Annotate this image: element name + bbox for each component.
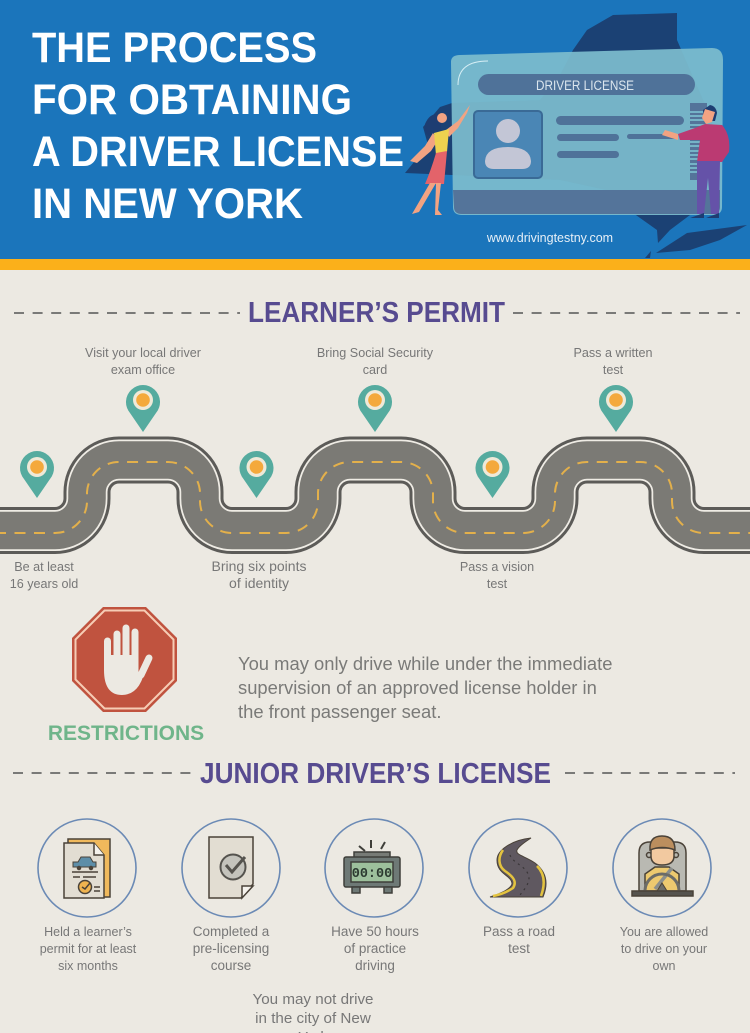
step: vision test: test <box>487 577 508 591</box>
map: New York state silhouette <box>405 13 747 258</box>
icon: course certificate <box>209 837 253 898</box>
caption: learner's permit held: six months <box>58 959 118 973</box>
caption: road test: Pass a road <box>483 924 555 939</box>
icon: alarm clock: 00:00 <box>352 867 392 882</box>
caption: drive on your own: own <box>653 959 676 973</box>
step: age requirement: 16 years old <box>10 577 78 591</box>
step: age requirement: Be at least <box>14 560 74 574</box>
driver license card <box>451 48 723 215</box>
pin 4 <box>358 385 392 432</box>
step: six points of identity: of identity <box>229 575 289 591</box>
caption: drive on your own: You are allowed <box>620 925 708 939</box>
title: THE PROCESS <box>32 24 317 72</box>
caption: drive on your own: to drive on your <box>621 942 707 956</box>
caption: road test: test <box>508 941 530 956</box>
caption: learner's permit held: permit for at least <box>40 942 137 956</box>
restrictions text: You may only drive while under the immediate <box>238 653 612 674</box>
caption: 50 hours practice: driving <box>355 958 395 973</box>
icon circles row <box>38 819 711 917</box>
caption: pre-licensing course: Completed a <box>193 924 270 939</box>
title: A DRIVER LICENSE <box>32 128 404 176</box>
caption: pre-licensing course: pre-licensing <box>193 941 269 956</box>
icon: driver at wheel <box>632 836 693 896</box>
card title bar <box>478 74 695 95</box>
step: visit exam office: exam office <box>111 363 175 377</box>
restriction note: New York City: in the city of New <box>255 1010 371 1027</box>
illustration: man <box>662 105 729 218</box>
card data lines <box>556 116 684 158</box>
card title bar: DRIVER LICENSE <box>536 78 634 93</box>
website url: www.drivingtestny.com <box>486 231 613 245</box>
pin 2 <box>126 385 160 432</box>
title <box>32 24 404 228</box>
pin 3 <box>240 451 274 498</box>
step: six points of identity: Bring six points <box>212 558 306 574</box>
caption: learner's permit held: Held a learner’s <box>44 925 132 939</box>
icon: permit document <box>64 839 110 898</box>
icon: alarm clock <box>344 840 400 893</box>
restrictions text: the front passenger seat. <box>238 701 441 722</box>
title: IN NEW YORK <box>32 180 303 228</box>
winding road <box>0 460 750 533</box>
icon: stop sign with hand <box>72 607 177 712</box>
pin 6 <box>599 385 633 432</box>
restrictions text: supervision of an approved license holder in <box>238 677 597 698</box>
step: social security card: Bring Social Security <box>317 346 434 360</box>
map pins <box>20 385 633 498</box>
pin 5 <box>475 451 510 498</box>
restrictions label: RESTRICTIONS <box>48 722 204 745</box>
card barcode <box>690 103 707 180</box>
pin 1 <box>20 451 54 498</box>
step: vision test: Pass a vision <box>460 560 534 574</box>
step: written test: test <box>603 363 624 377</box>
title: FOR OBTAINING <box>32 76 352 124</box>
card photo <box>474 111 542 178</box>
caption: 50 hours practice: Have 50 hours <box>331 924 419 939</box>
step: social security card: card <box>363 363 387 377</box>
restriction note: New York City: You may not drive <box>252 991 374 1008</box>
caption: 50 hours practice: of practice <box>344 941 406 956</box>
section heading: learner's permit: LEARNER’S PERMIT <box>248 297 505 329</box>
caption: pre-licensing course: course <box>211 958 251 973</box>
illustration: woman <box>410 105 470 215</box>
header banner <box>0 0 750 270</box>
step: visit exam office: Visit your local driver <box>85 346 201 360</box>
icon: winding road <box>490 838 546 897</box>
step: written test: Pass a written <box>573 346 653 360</box>
section heading: junior driver's license: JUNIOR DRIVER’S LICENSE <box>200 758 551 790</box>
